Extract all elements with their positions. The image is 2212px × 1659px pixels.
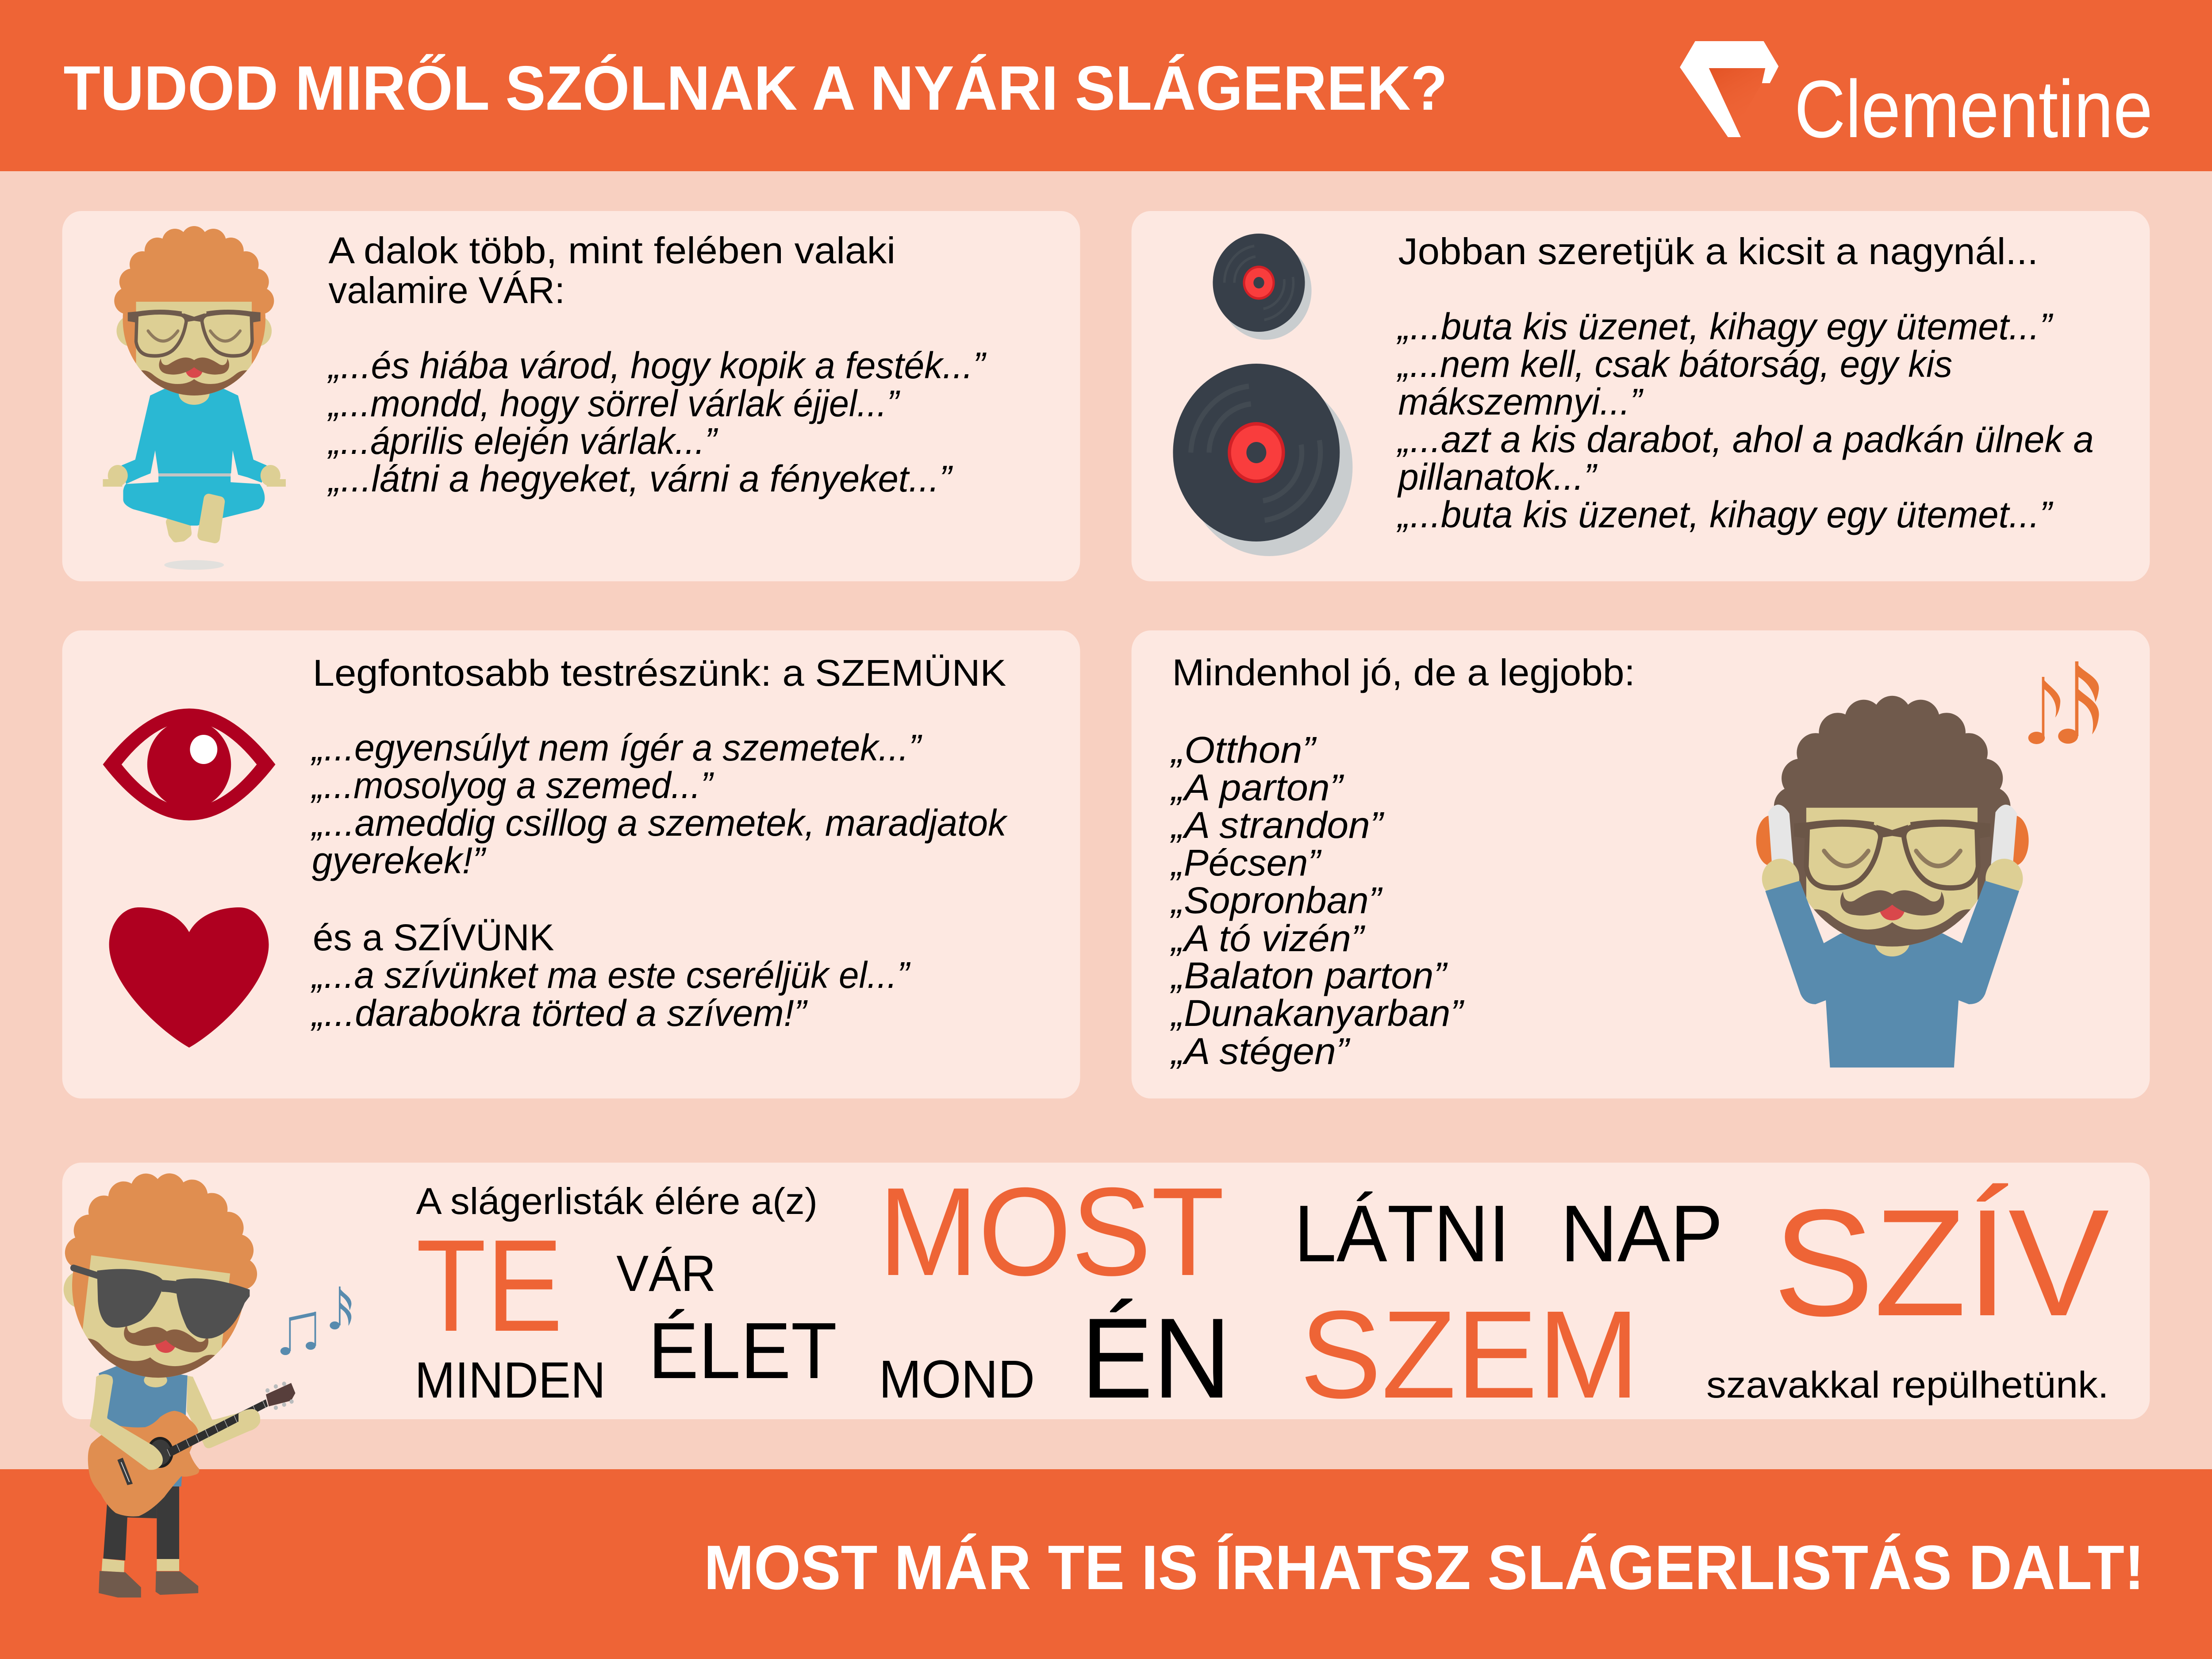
quotes: „...buta kis üzenet, kihagy egy ütemet...” bbox=[1396, 494, 2054, 536]
quotes: „...és hiába várod, hogy kopik a festék...” bbox=[327, 345, 987, 387]
icon: blue music notes bbox=[280, 1286, 351, 1355]
word cloud: LÁTNI bbox=[1294, 1189, 1510, 1279]
strumming arm bbox=[90, 1374, 163, 1470]
logo: Clementine: Clementine bbox=[1794, 64, 2153, 154]
quotes: „...nem kell, csak bátorság, egy kis bbox=[1397, 344, 1952, 385]
word cloud: MOND bbox=[879, 1349, 1035, 1409]
list of places: „A parton” bbox=[1170, 767, 1344, 809]
quotes: heart bbox=[311, 955, 911, 1034]
illustration: guitarist bbox=[51, 1161, 296, 1598]
title: TUDOD MIRŐL SZÓLNAK A NYÁRI SLÁGEREK? bbox=[63, 53, 1448, 123]
icon: big vinyl record bbox=[1173, 364, 1352, 556]
quotes: pillanatok...” bbox=[1397, 457, 1598, 498]
closing text: szavakkal repülhetünk. bbox=[1706, 1364, 2109, 1406]
word cloud: ÉN bbox=[1081, 1294, 1231, 1422]
word cloud bbox=[415, 1162, 2110, 1424]
footer slogan: MOST MÁR TE IS ÍRHATSZ SLÁGERLISTÁS DALT! bbox=[704, 1532, 2144, 1603]
list of places: „Balaton parton” bbox=[1170, 955, 1448, 997]
word cloud: SZEM bbox=[1300, 1285, 1640, 1424]
word cloud: NAP bbox=[1560, 1189, 1723, 1279]
quotes bbox=[327, 345, 987, 500]
quotes: „...mondd, hogy sörrel várlak éjjel...” bbox=[327, 383, 901, 425]
illustration: meditating man bbox=[103, 226, 286, 570]
list of places: „Sopronban” bbox=[1170, 880, 1383, 922]
list of places: „Otthon” bbox=[1170, 730, 1317, 771]
heading: eyes: Legfontosabb testrészünk: a SZEMÜNK bbox=[313, 653, 1006, 694]
icon: eye bbox=[103, 709, 276, 820]
list of places: „A strandon” bbox=[1170, 805, 1385, 846]
quotes: „...buta kis üzenet, kihagy egy ütemet...” bbox=[1396, 306, 2054, 348]
panel: word cloud bbox=[62, 1162, 2150, 1424]
quotes: mákszemnyi...” bbox=[1398, 381, 1644, 423]
quotes bbox=[1396, 306, 2094, 536]
quotes: eyes: „...mosolyog a szemed...” bbox=[311, 765, 714, 806]
illustration: man with headphones bbox=[1756, 696, 2029, 1068]
heading: heart: és a SZÍVÜNK bbox=[313, 917, 554, 959]
panel: places bbox=[1132, 630, 2150, 1098]
footer band bbox=[0, 1469, 2212, 1659]
word cloud: VÁR bbox=[616, 1245, 716, 1302]
quotes: „...látni a hegyeket, várni a fényeket...” bbox=[327, 458, 953, 500]
word cloud: MINDEN bbox=[415, 1352, 606, 1409]
list of places: „Pécsen” bbox=[1170, 842, 1322, 884]
guitar bbox=[88, 1382, 296, 1517]
list of places: „A tó vizén” bbox=[1170, 918, 1366, 960]
quotes: „...április elején várlak...” bbox=[327, 421, 718, 462]
panel: small over big bbox=[1132, 211, 2150, 581]
hand on neck bbox=[238, 1409, 260, 1436]
intro text: A slágerlisták élére a(z) bbox=[416, 1181, 818, 1222]
icon: heart bbox=[109, 907, 269, 1048]
list of places bbox=[1170, 730, 1465, 1072]
list of places: „A stégen” bbox=[1170, 1031, 1351, 1072]
quotes: eyes: gyerekek!” bbox=[312, 840, 487, 882]
quotes: eyes: „...egyensúlyt nem ígér a szemetek...” bbox=[311, 727, 922, 769]
quotes: eyes: „...ameddig csillog a szemetek, maradjatok bbox=[311, 803, 1008, 844]
head with sunglasses bbox=[64, 1173, 257, 1378]
heading: A dalok több, mint felében valaki bbox=[329, 230, 895, 272]
quotes: eyes bbox=[311, 727, 1008, 882]
panel: eye and heart bbox=[62, 630, 1080, 1098]
heading: Jobban szeretjük a kicsit a nagynál... bbox=[1398, 231, 2038, 273]
word cloud: MOST bbox=[879, 1162, 1225, 1302]
quotes: „...azt a kis darabot, ahol a padkán ülnek a bbox=[1396, 419, 2094, 461]
panel: waiting bbox=[62, 211, 1080, 581]
word cloud: ÉLET bbox=[648, 1306, 837, 1395]
icon: small vinyl record bbox=[1213, 234, 1312, 340]
word cloud: TE bbox=[416, 1212, 563, 1359]
quotes: heart: „...a szívünket ma este cseréljük el...” bbox=[311, 955, 911, 996]
quotes: heart: „...darabokra törted a szívem!” bbox=[311, 993, 808, 1034]
heading line 2: valamire VÁR: bbox=[329, 270, 565, 311]
icon: orange music notes bbox=[2028, 661, 2099, 744]
word cloud: SZÍV bbox=[1773, 1177, 2110, 1348]
heading: Mindenhol jó, de a legjobb: bbox=[1172, 652, 1635, 694]
list of places: „Dunakanyarban” bbox=[1170, 993, 1465, 1034]
logo: Clementine bbox=[1680, 41, 2153, 154]
header band bbox=[0, 0, 2212, 171]
